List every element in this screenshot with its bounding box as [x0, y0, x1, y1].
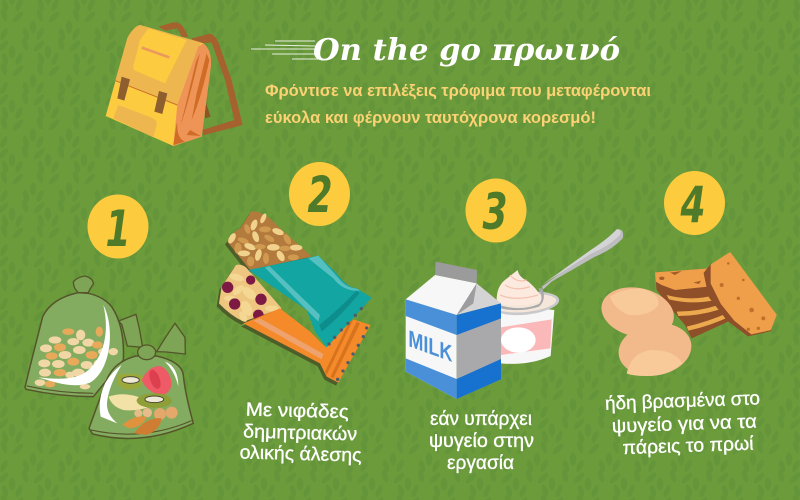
badge: number 3: [466, 178, 526, 242]
icon: yogurt cup with spoon: [491, 229, 623, 364]
text block: subtitle: Φρόντισε να επιλέξεις τρόφιμα που μεταφέρονται: [265, 82, 651, 100]
icon: granola bars: [217, 211, 372, 386]
caption: step 1: [239, 399, 363, 467]
badge: number 1: [88, 194, 148, 259]
badge: number 3: 3: [482, 184, 508, 242]
icon: rusks and eggs: [597, 253, 776, 381]
caption: step 4: ήδη βρασμένα στο: [605, 388, 760, 415]
text block: subtitle: [265, 82, 651, 127]
badge: number 4: 4: [680, 177, 706, 235]
caption: step 3: εργασία: [447, 453, 514, 474]
icon: milk carton: [406, 262, 501, 399]
caption: step 4: ψυγείο για να τα: [611, 411, 757, 437]
badge: number 2: 2: [307, 167, 333, 225]
caption: step 1: Με νιφάδες: [245, 399, 349, 423]
caption: step 1: ολικής άλεσης: [239, 442, 362, 467]
caption: step 4: [605, 388, 762, 460]
caption: step 1: δημητριακών: [243, 421, 357, 445]
caption: step 4: πάρεις το πρωί: [622, 434, 755, 459]
badge: number 1: 1: [105, 201, 131, 259]
rusk stack: [655, 268, 735, 338]
caption: step 3: εάν υπάρχει: [430, 409, 532, 430]
caption: step 3: ψυγείο στην: [429, 431, 534, 452]
bar shadow: [217, 214, 368, 386]
bag of fruit: [89, 314, 193, 438]
orange wrapper: [243, 308, 371, 383]
large rusk: [705, 253, 776, 335]
text block: subtitle: εύκολα και φέρνουν ταυτόχρονα κορεσμό!: [265, 109, 596, 127]
badge: number 2: [289, 162, 350, 226]
oat bar: [227, 211, 312, 270]
bag of oats: [25, 276, 124, 397]
caption: step 3: [429, 409, 534, 474]
eggs: [597, 281, 696, 381]
icon: backpack: [106, 22, 243, 146]
icon: milk carton: MILK: [408, 326, 453, 368]
icon: bags of oats and fruit: [25, 276, 193, 438]
fruit bar: [219, 265, 282, 323]
badge: number 4: [664, 171, 725, 235]
teal wrapper: [248, 256, 372, 347]
heading: title with speed lines: On the go πρωινό: [313, 33, 620, 68]
